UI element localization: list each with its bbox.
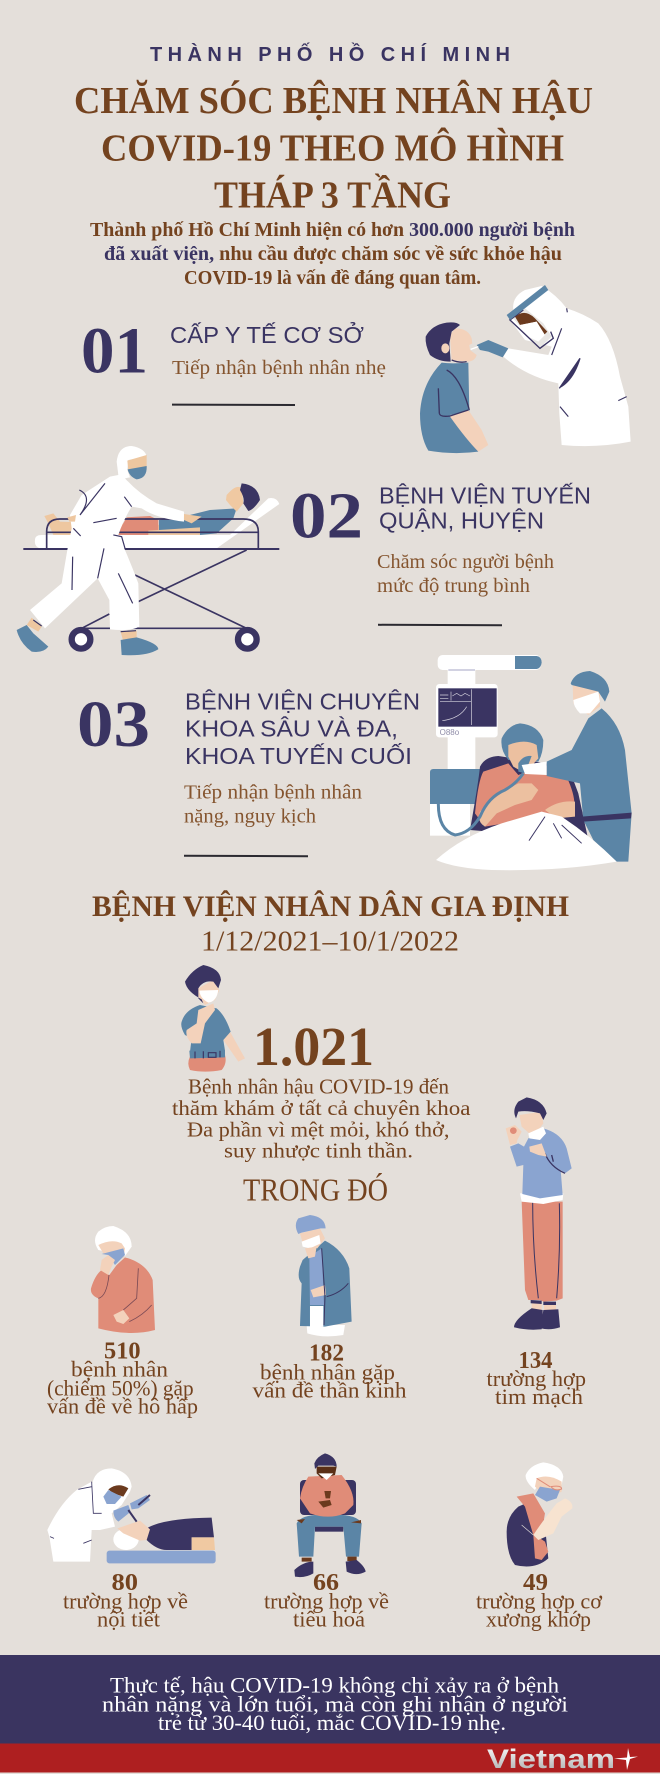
stat: 49 musculoskeletal: [476, 1570, 602, 1632]
kicker: city name: THÀNH PHỐ HỒ CHÍ MINH: [150, 42, 510, 66]
icon: man touching throat: [181, 965, 245, 1072]
tier 03 description: Tiếp nhận bệnh nhân: [184, 782, 362, 804]
section heading: hospital: BỆNH VIỆN NHÂN DÂN GIA ĐỊNH: [92, 890, 569, 923]
tier 02 description: [377, 551, 554, 597]
stat: 510 respiratory: (chiếm 50%) gặp: [47, 1375, 194, 1400]
intro paragraph: đã xuất viện, nhu cầu được chăm sóc về sức khỏe hậu: [104, 243, 562, 265]
icon: person sitting with cup: [294, 1453, 366, 1577]
tier 03 heading: KHOA SÂU VÀ ĐA,: [185, 716, 398, 742]
tier 03 number: 03: [77, 688, 150, 761]
text block: patients description: Đa phần vì mệt mỏi, khó thở,: [187, 1118, 450, 1142]
stat: 134 cardiovascular: tim mạch: [495, 1384, 583, 1409]
icon: elderly man with stomach ache: [296, 1215, 352, 1336]
stat: 80 endocrine: trường hợp về: [63, 1589, 188, 1614]
panel: closing note: nhân nặng và lớn tuổi, mà còn ghi nhận ở người: [102, 1691, 568, 1716]
tier 03 heading: [185, 688, 420, 769]
stat: 66 digestive: trường hợp về: [264, 1589, 389, 1614]
panel: closing note: [0, 1655, 660, 1744]
stat: 510 respiratory: 510: [104, 1339, 141, 1365]
tier 02 description: Chăm sóc người bệnh: [377, 551, 554, 573]
title: THÁP 3 TẦNG: [214, 173, 451, 216]
logo: Vietnam+: Vietnam: [487, 1744, 615, 1774]
stat: 49 musculoskeletal: trường hợp cơ: [476, 1589, 602, 1614]
text block: patients description: thăm khám ở tất cả chuyên khoa: [172, 1096, 471, 1120]
title: COVID-19 THEO MÔ HÌNH: [101, 127, 564, 170]
tier 03 heading: KHOA TUYẾN CUỐI: [185, 742, 412, 769]
intro paragraph: COVID-19 là vấn đề đáng quan tâm.: [184, 267, 481, 289]
stat: 510 respiratory: bệnh nhân: [71, 1357, 168, 1382]
stat: 80 endocrine: 80: [112, 1570, 138, 1596]
icon: elderly person with joint pain: [507, 1462, 572, 1566]
tier 02 heading: QUẬN, HUYỆN: [379, 508, 544, 534]
stat: 66 digestive: [264, 1570, 389, 1632]
icon: doctor examining patient: [47, 1468, 216, 1563]
panel: closing note: trẻ từ 30-40 tuổi, mắc COVID-19 nhẹ.: [158, 1710, 506, 1735]
tier 01 description: Tiếp nhận bệnh nhân nhẹ: [172, 357, 386, 379]
tier 03 description: nặng, nguy kịch: [184, 806, 316, 828]
big number: 1.021: [253, 1016, 374, 1077]
tier 02 description: mức độ trung bình: [377, 575, 530, 597]
panel: closing note: Thực tế, hậu COVID-19 không chỉ xảy ra ở bệnh: [110, 1672, 559, 1697]
tier 02 heading: [379, 481, 591, 534]
title: CHĂM SÓC BỆNH NHÂN HẬU: [74, 80, 593, 122]
tier 03 heading: BỆNH VIỆN CHUYÊN: [185, 688, 420, 714]
stat: 80 endocrine: [63, 1570, 188, 1632]
stat: 134 cardiovascular: 134: [518, 1348, 552, 1374]
stat: 182 neurological: [252, 1341, 406, 1402]
stat: 182 neurological: vấn đề thần kinh: [252, 1377, 406, 1402]
tier 01 heading: CẤP Y TẾ CƠ SỞ: [170, 320, 364, 348]
stat: 134 cardiovascular: trường hợp: [486, 1366, 586, 1391]
stat: 134 cardiovascular: [486, 1348, 586, 1409]
stat: 510 respiratory: vấn đề về hô hấp: [47, 1393, 198, 1418]
tier 01 number: 01: [81, 315, 148, 388]
text block: patients description: [172, 1074, 471, 1163]
intro paragraph: [90, 219, 575, 289]
tier 03 description: [184, 782, 362, 828]
stat: 182 neurological: 182: [309, 1341, 344, 1367]
footer bar: [0, 1744, 660, 1772]
section date range: 1/12/2021–10/1/2022: [201, 926, 459, 958]
icon: man with chest pain: [506, 1097, 572, 1330]
title: [74, 80, 593, 216]
stat: 510 respiratory: [47, 1339, 198, 1418]
text block: patients description: Bệnh nhân hậu COVID-19 đến: [188, 1074, 449, 1098]
logo: Vietnam+: [487, 1744, 638, 1774]
icon: throat swab test illustration: [420, 285, 631, 453]
icon: stretcher illustration: [17, 446, 279, 655]
icon: elderly woman coughing: [91, 1226, 155, 1333]
heading: among them: TRONG ĐÓ: [243, 1172, 388, 1208]
stat: 49 musculoskeletal: xương khớp: [486, 1607, 591, 1632]
stat: 182 neurological: bệnh nhân gặp: [260, 1359, 395, 1384]
stat: 80 endocrine: nội tiết: [97, 1607, 160, 1632]
intro paragraph: Thành phố Hồ Chí Minh hiện có hơn 300.000 người bệnh: [90, 219, 575, 241]
stat: 66 digestive: tiêu hoá: [293, 1607, 365, 1632]
stat: 49 musculoskeletal: 49: [523, 1570, 548, 1596]
icon: ICU ventilator illustration: [430, 655, 632, 870]
tier 02 number: 02: [290, 479, 363, 552]
tier 02 heading: BỆNH VIỆN TUYẾN: [379, 481, 591, 508]
icon: ICU ventilator illustration: O88o: [440, 728, 460, 737]
text block: patients description: suy nhược tinh thần.: [224, 1139, 413, 1163]
stat: 66 digestive: 66: [313, 1570, 339, 1596]
